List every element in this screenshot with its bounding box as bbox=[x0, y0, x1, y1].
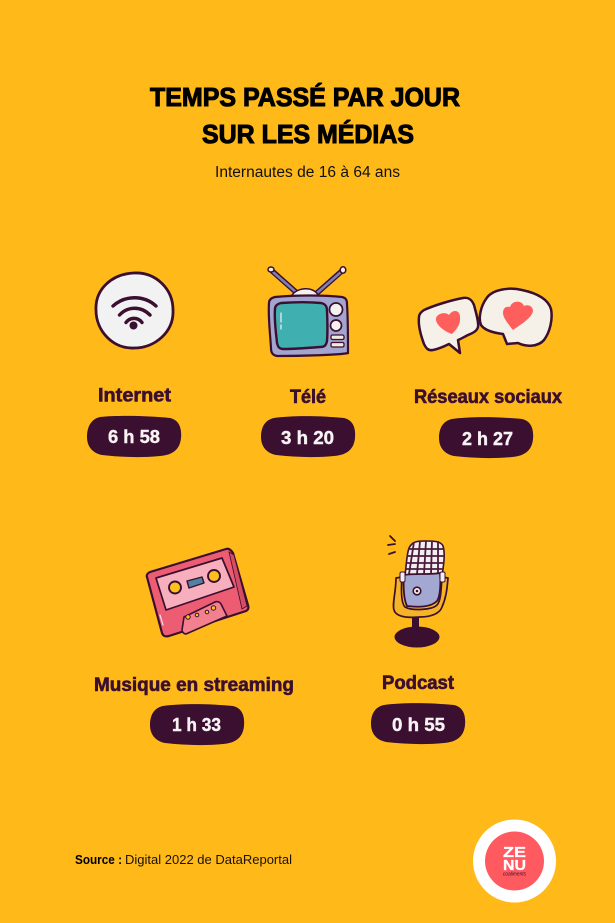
label: Internet: Internet bbox=[98, 386, 172, 406]
title: SUR LES MÉDIAS bbox=[202, 119, 414, 149]
label: Podcast: Podcast bbox=[382, 673, 455, 694]
logo: Zenu bbox=[473, 820, 556, 902]
icon: chat bubbles with hearts bbox=[419, 289, 552, 353]
logo: Zenu: NU bbox=[503, 857, 526, 874]
logo: Zenu: ZE bbox=[503, 844, 526, 861]
label: Réseaux sociaux: Réseaux sociaux bbox=[414, 387, 562, 408]
icon: cassette bbox=[147, 549, 248, 636]
icon: microphone bbox=[388, 536, 448, 648]
left bubble bbox=[419, 298, 478, 353]
pill: 6 h 58: 6 h 58 bbox=[108, 427, 160, 447]
pill: 2 h 27: 2 h 27 bbox=[462, 429, 513, 449]
pill: 1 h 33 bbox=[150, 704, 244, 745]
source: Source : bbox=[75, 853, 122, 867]
pill: 0 h 55 bbox=[371, 703, 465, 744]
icon: wifi bbox=[96, 273, 173, 348]
icon: tv bbox=[268, 267, 348, 356]
pill: 2 h 27 bbox=[439, 417, 533, 458]
pill: 6 h 58 bbox=[87, 416, 181, 457]
subtitle: Internautes de 16 à 64 ans bbox=[215, 164, 400, 181]
label: Musique en streaming: Musique en streaming bbox=[94, 675, 294, 696]
logo: Zenu: coaliments bbox=[503, 872, 526, 878]
pill: 3 h 20: 3 h 20 bbox=[281, 428, 334, 448]
label: Télé: Télé bbox=[290, 387, 326, 408]
title bbox=[150, 82, 460, 149]
pill: 0 h 55: 0 h 55 bbox=[392, 715, 445, 735]
source: Digital 2022 de DataReportal bbox=[125, 853, 292, 867]
pill: 3 h 20 bbox=[261, 416, 355, 457]
title: TEMPS PASSÉ PAR JOUR bbox=[150, 82, 460, 112]
right bubble bbox=[480, 289, 552, 346]
pill: 1 h 33: 1 h 33 bbox=[172, 715, 221, 735]
